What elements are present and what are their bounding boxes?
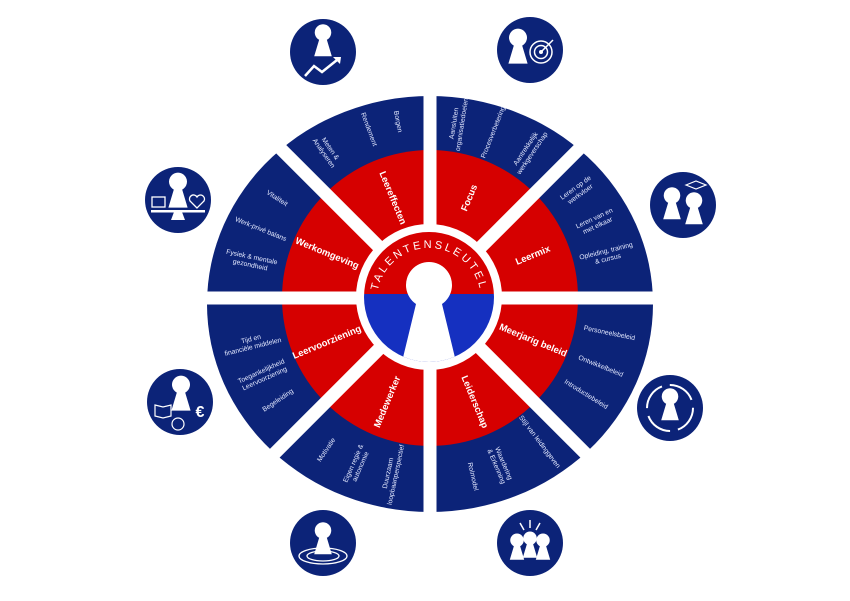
navy items: werkvloer bbox=[566, 183, 595, 207]
navy items: Opleiding, training bbox=[579, 242, 634, 262]
navy items: met elkaar bbox=[582, 216, 614, 236]
navy items: Leervoorziening bbox=[241, 366, 289, 392]
icon: cycle bbox=[637, 375, 703, 441]
navy items: Aantrekkelijk bbox=[512, 131, 540, 167]
navy items: Duurzaam bbox=[382, 457, 395, 489]
red labels: Focus bbox=[459, 183, 480, 213]
navy items: Rendement bbox=[359, 112, 378, 147]
navy items: Vitaliteit bbox=[265, 189, 289, 208]
center key circle bbox=[356, 224, 502, 370]
navy items: Waardering bbox=[493, 446, 513, 481]
navy items: autonomie bbox=[352, 451, 371, 483]
red labels: Medewerker bbox=[372, 374, 403, 430]
icon: resources bbox=[147, 369, 213, 435]
navy items: Analyseren bbox=[311, 138, 336, 170]
navy items: Eigen regie & bbox=[342, 443, 365, 484]
navy items: Toegankelijkheid bbox=[237, 358, 286, 385]
navy items: & cursus bbox=[594, 253, 622, 266]
red inner ring bbox=[282, 150, 578, 446]
icon: leadership group bbox=[497, 510, 563, 576]
navy items: werkgeverschap bbox=[515, 131, 550, 177]
red labels: Leervoorziening bbox=[291, 323, 363, 362]
navy items: financiële middelen bbox=[224, 337, 282, 358]
title curved: TALENTENSLEUTEL bbox=[370, 240, 486, 289]
navy items: Leren van en bbox=[575, 207, 614, 230]
navy items: Ontwikkelbeleid bbox=[577, 354, 624, 379]
icon: employee ripple bbox=[290, 510, 356, 576]
red labels: Leermix bbox=[514, 243, 553, 268]
navy items: Stijl van leidinggeven bbox=[517, 414, 561, 470]
icon: target bbox=[497, 17, 563, 83]
icon: growth bbox=[290, 19, 356, 85]
navy items: Procesverbetering bbox=[480, 105, 507, 159]
wheel bbox=[180, 60, 680, 540]
red labels: Leereffecten bbox=[376, 170, 408, 226]
red labels: Meerjarig beleid bbox=[497, 322, 569, 360]
navy items: Personeelsbeleid bbox=[583, 325, 636, 342]
red labels: Leiderschap bbox=[459, 374, 490, 430]
icon: learning together bbox=[650, 172, 716, 238]
navy items: Tijd en bbox=[241, 334, 262, 345]
red labels bbox=[291, 170, 569, 430]
navy items: Rolmodel bbox=[466, 462, 479, 492]
navy items: Borgen bbox=[392, 110, 403, 133]
navy items bbox=[222, 96, 636, 506]
navy items: Fysiek & mentale bbox=[225, 249, 278, 266]
navy items: loopbaanperspectief bbox=[387, 444, 406, 506]
keyhole bbox=[403, 262, 455, 362]
navy items: organisatiedoelen bbox=[455, 97, 470, 152]
navy items: Meten & bbox=[320, 137, 340, 162]
red labels: Werkomgeving bbox=[293, 236, 361, 272]
navy items: Begeleiding bbox=[261, 388, 295, 414]
icon: resources: € bbox=[196, 404, 205, 421]
navy items: Motivatie bbox=[316, 437, 337, 463]
icon: balance bbox=[145, 167, 211, 233]
navy outer ring bbox=[207, 96, 653, 512]
navy items: gezondheid bbox=[232, 258, 268, 273]
navy items: Aansluiten bbox=[449, 107, 461, 140]
navy items: Werk-privé balans bbox=[234, 216, 288, 243]
navy items: & Erkenning bbox=[485, 448, 506, 485]
navy items: Introductiebeleid bbox=[563, 379, 609, 411]
navy items: Leren op de bbox=[559, 175, 593, 202]
